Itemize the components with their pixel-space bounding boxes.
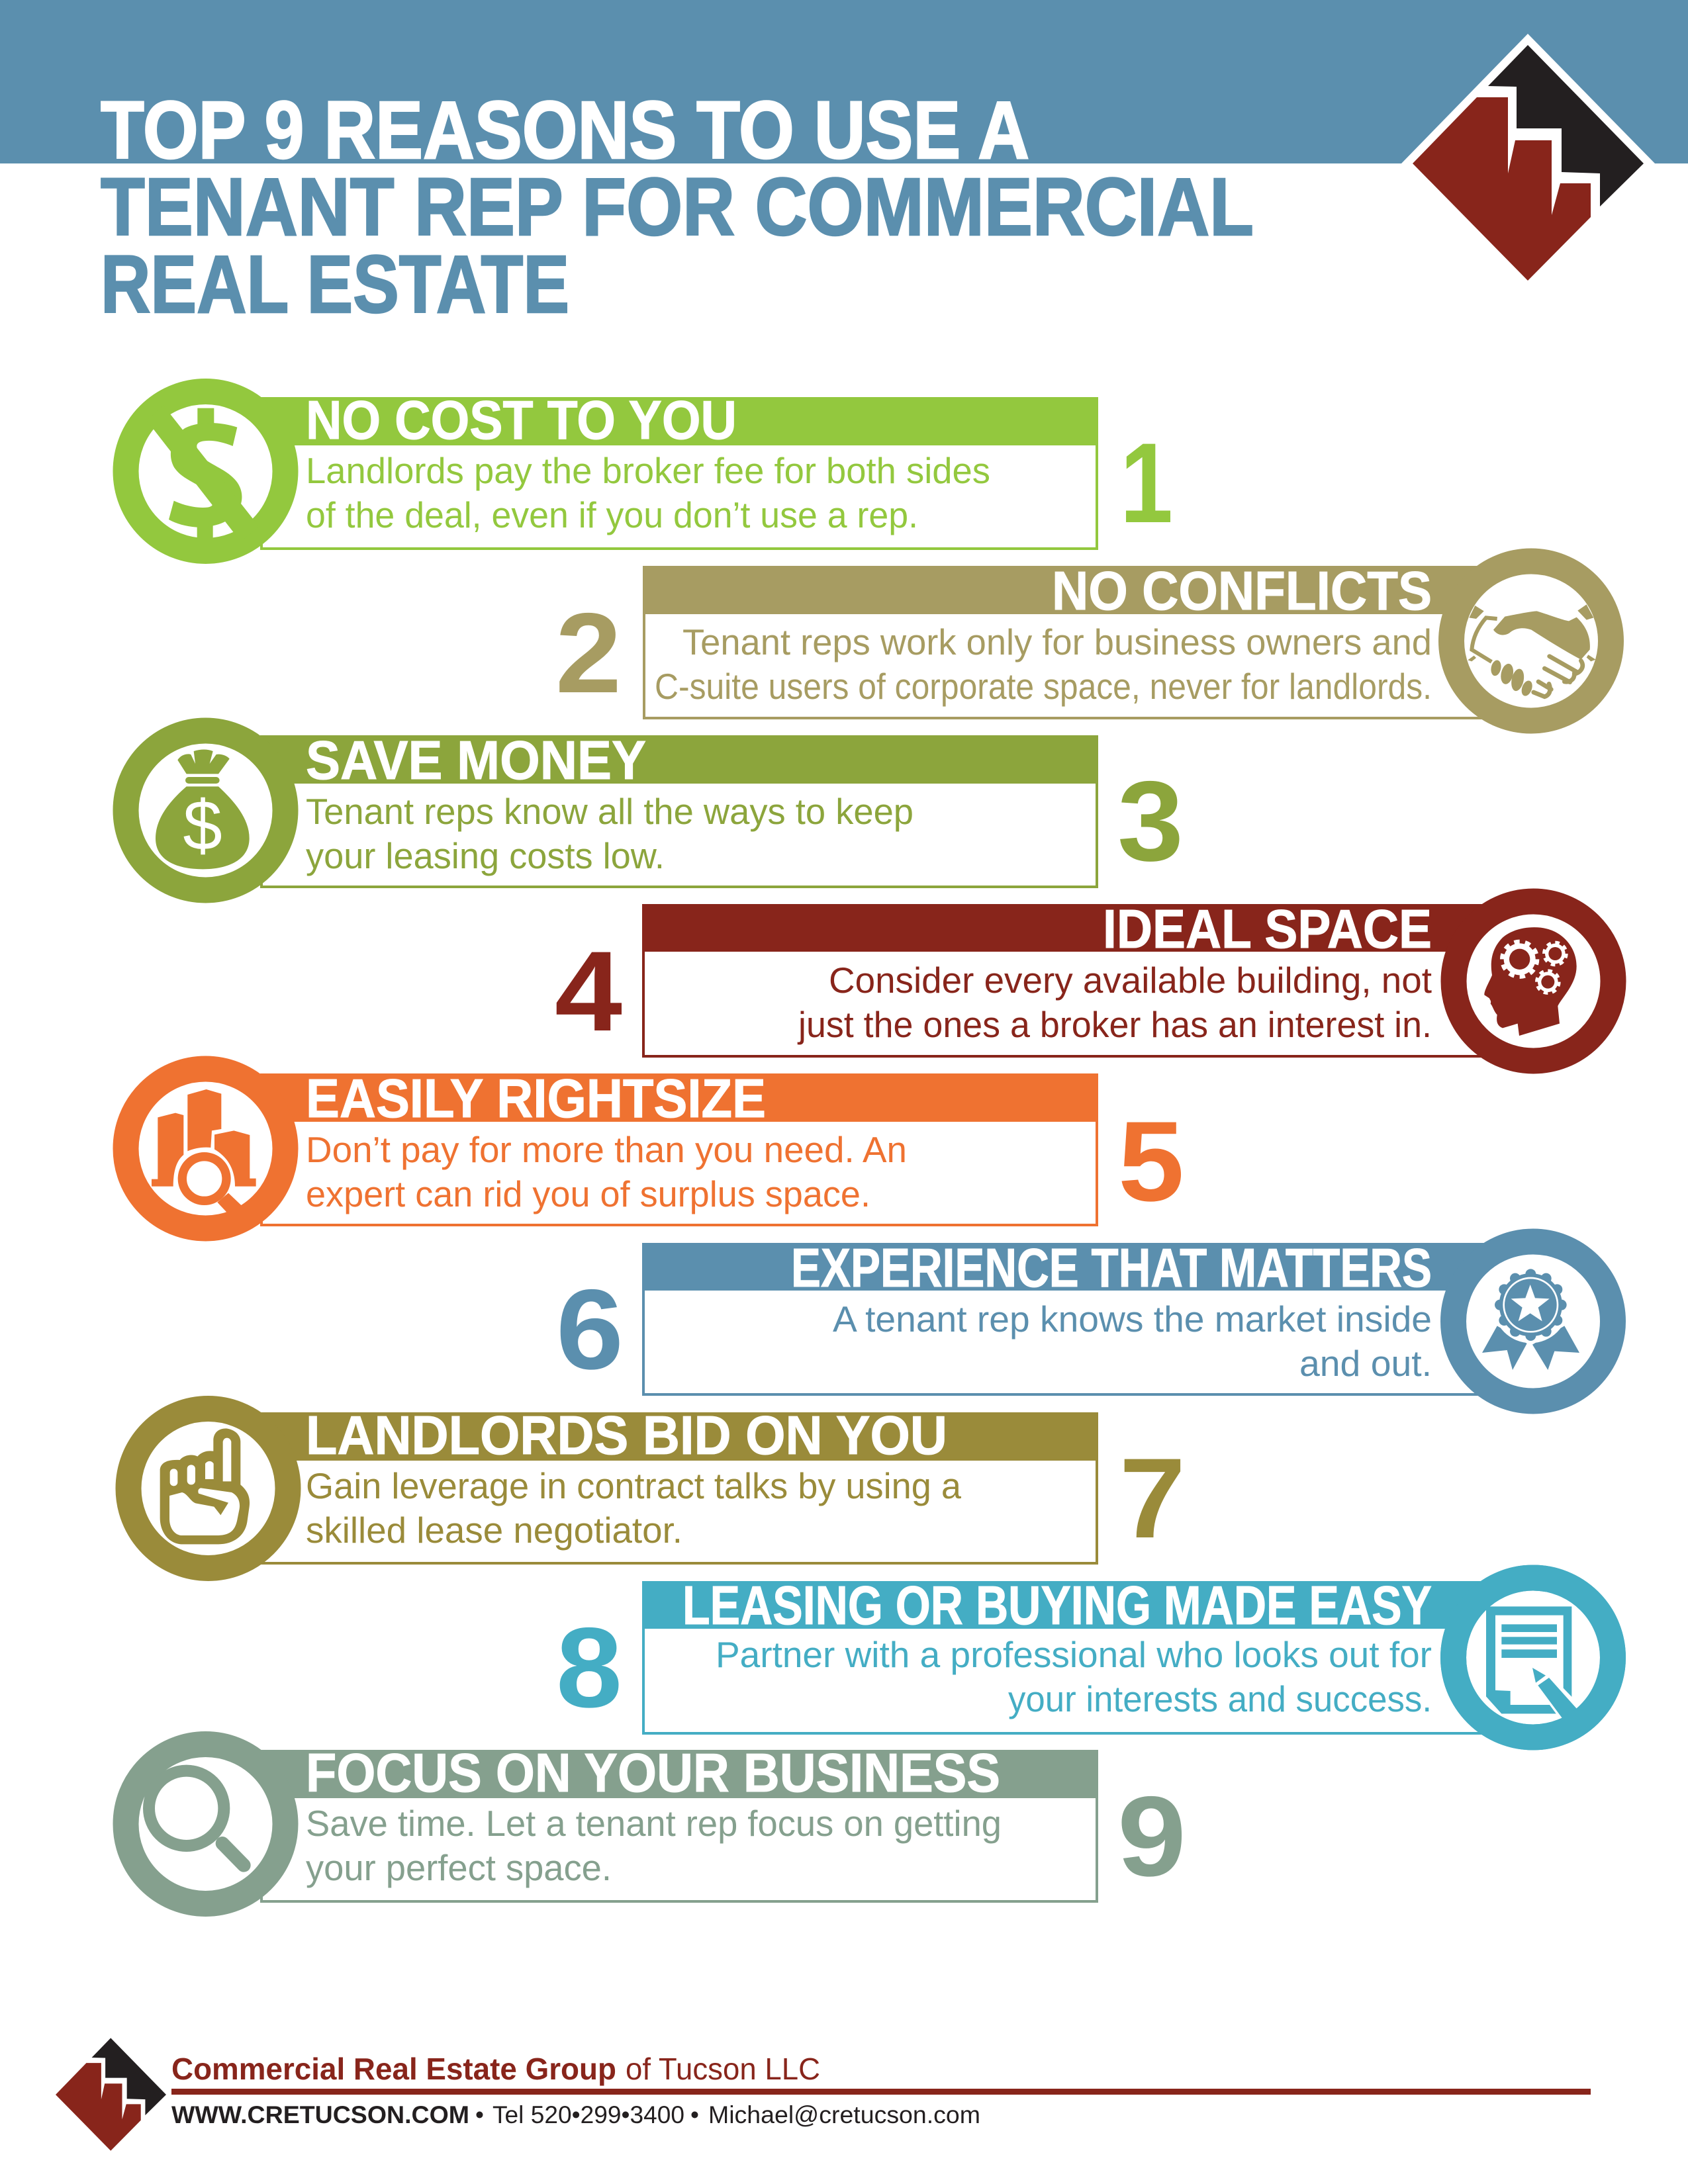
number 5: 5 (1118, 1098, 1184, 1225)
body text: Consider every available building, not (829, 960, 1432, 1001)
footer company name: Commercial Real Estate Group (171, 2052, 616, 2086)
icon: head with gears (1454, 901, 1613, 1061)
body text (716, 1634, 1432, 1719)
body box (643, 950, 1533, 1056)
heading bar (260, 1412, 1098, 1459)
body text (797, 960, 1432, 1045)
number 2: 2 (555, 590, 622, 717)
row 4: ideal space (555, 898, 1613, 1061)
heading: SAVE MONEY (306, 729, 646, 791)
row 3: save money (126, 729, 1184, 890)
heading: EASILY RIGHTSIZE (306, 1068, 766, 1129)
body box (261, 444, 1097, 549)
heading: FOCUS ON YOUR BUSINESS (306, 1742, 1000, 1803)
heading: NO CONFLICTS (1052, 560, 1432, 621)
row 9: focus on your business (126, 1742, 1186, 1903)
body text: your perfect space. (306, 1847, 612, 1888)
title (101, 85, 1254, 330)
icon: document and pencil (1454, 1578, 1613, 1737)
body box (643, 1627, 1533, 1733)
body box (643, 1289, 1533, 1394)
icon: raised finger hand (128, 1408, 288, 1569)
heading bar (642, 904, 1533, 950)
body text: skilled lease negotiator. (306, 1510, 682, 1551)
title: REAL ESTATE (101, 240, 569, 330)
heading: LEASING OR BUYING MADE EASY (682, 1574, 1432, 1636)
row 6: experience that matters (556, 1237, 1613, 1401)
row 1: no cost to you (126, 389, 1173, 551)
number 1: 1 (1120, 420, 1173, 547)
heading bar (260, 735, 1098, 782)
number 9: 9 (1117, 1773, 1186, 1900)
body text: expert can rid you of surplus space. (306, 1173, 870, 1214)
footer contact line: Tel 520•299•3400 (492, 2101, 684, 2128)
footer contact line: • (690, 2101, 699, 2128)
footer contact line: WWW.CRETUCSON.COM (171, 2101, 469, 2128)
header banner (0, 0, 1688, 163)
body box (261, 1459, 1097, 1563)
title: TOP 9 REASONS TO USE A (101, 85, 1029, 176)
number 8: 8 (556, 1604, 622, 1731)
heading: IDEAL SPACE (1103, 898, 1432, 960)
heading bar (260, 1073, 1098, 1120)
footer contact line: Michael@cretucson.com (708, 2101, 980, 2128)
heading bar (642, 1243, 1533, 1289)
body text: just the ones a broker has an interest in. (797, 1004, 1432, 1045)
body box (261, 782, 1097, 887)
body text: Don’t pay for more than you need. An (306, 1129, 907, 1170)
icon: magnifying glass (126, 1745, 285, 1903)
heading: LANDLORDS BID ON YOU (306, 1404, 947, 1466)
body text: Tenant reps work only for business owners and (682, 621, 1432, 662)
icon: money bag: $ (183, 786, 222, 865)
icon: money bag (126, 731, 285, 890)
body text: Save time. Let a tenant rep focus on getting (306, 1803, 1002, 1844)
heading: EXPERIENCE THAT MATTERS (791, 1237, 1432, 1298)
footer company name (171, 2052, 820, 2086)
title: TENANT REP FOR COMMERCIAL (101, 162, 1254, 253)
row 5: easily rightsize (126, 1068, 1184, 1228)
body text: Partner with a professional who looks out for (716, 1634, 1432, 1675)
body text (306, 450, 990, 535)
body text: Gain leverage in contract talks by using a (306, 1465, 961, 1506)
body text (655, 621, 1432, 707)
body text (306, 1465, 961, 1551)
body box (644, 613, 1531, 718)
body text: Landlords pay the broker fee for both sides (306, 450, 990, 491)
number 4: 4 (555, 928, 622, 1055)
body box (261, 1120, 1097, 1225)
body text: of the deal, even if you don’t use a rep. (306, 494, 918, 535)
body text: and out. (1299, 1343, 1432, 1384)
footer rule (171, 2089, 1591, 2095)
row 7: landlords bid on you (128, 1404, 1186, 1569)
heading bar (260, 397, 1098, 444)
number 7: 7 (1119, 1435, 1186, 1562)
body box (261, 1797, 1097, 1901)
footer contact line: • (475, 2101, 484, 2128)
number 6: 6 (556, 1266, 624, 1393)
footer logo (56, 2038, 166, 2151)
logo: header diamond (1401, 34, 1655, 291)
row 2: no conflicts (555, 560, 1611, 721)
body text: your interests and success. (1008, 1678, 1432, 1719)
footer contact line (171, 2101, 980, 2128)
icon: handshake (1451, 561, 1611, 721)
number 3: 3 (1117, 758, 1184, 885)
body text: your leasing costs low. (306, 835, 665, 876)
footer company name: of Tucson LLC (626, 2052, 820, 2086)
body text (306, 791, 914, 876)
body text (306, 1129, 907, 1214)
body text: Tenant reps know all the ways to keep (306, 791, 914, 832)
heading bar (643, 566, 1531, 613)
icon: award medal (1454, 1242, 1613, 1401)
icon: crossed-out dollar (126, 392, 285, 551)
heading bar (642, 1581, 1533, 1627)
heading: NO COST TO YOU (306, 389, 737, 451)
body text (833, 1298, 1432, 1384)
body text: C-suite users of corporate space, never for landlords. (655, 666, 1432, 707)
heading bar (260, 1750, 1098, 1797)
body text (306, 1803, 1002, 1888)
body text: A tenant rep knows the market inside (833, 1298, 1432, 1340)
row 8: leasing or buying made easy (556, 1574, 1613, 1737)
icon: buildings with magnifier (126, 1069, 285, 1228)
